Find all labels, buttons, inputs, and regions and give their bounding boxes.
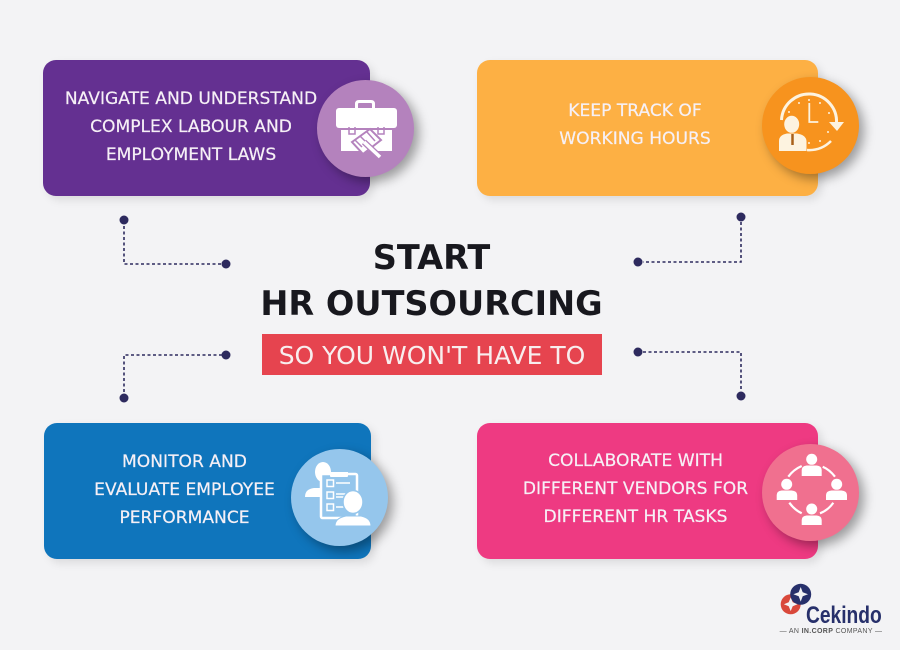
- connector: bottom right: [634, 348, 746, 400]
- text: navigate and understand: COMPLEX LABOUR AND: [90, 117, 292, 137]
- text: monitor and evaluate: PERFORMANCE: [119, 508, 250, 528]
- text: monitor and evaluate: EVALUATE EMPLOYEE: [94, 480, 275, 500]
- icon: clock with employee: [762, 77, 859, 174]
- connector: top right: [634, 212, 746, 266]
- text: monitor and evaluate: MONITOR AND: [122, 452, 247, 472]
- text: navigate and understand: EMPLOYMENT LAWS: [106, 145, 276, 165]
- icon: briefcase with handshake: [317, 80, 414, 177]
- logo: Cekindo: [780, 584, 882, 635]
- text: collaborate with vendors: DIFFERENT HR TASKS: [544, 507, 727, 527]
- panel: employee performance: [44, 423, 371, 559]
- text: collaborate with vendors: [523, 451, 748, 527]
- icon: circle of people: [762, 444, 859, 541]
- connector: top left: [120, 216, 230, 268]
- title: START: [373, 238, 490, 277]
- title: [260, 238, 603, 323]
- text: monitor and evaluate: [94, 452, 275, 528]
- panel: navigate labour laws: [43, 60, 370, 196]
- subtitle banner: [262, 334, 602, 375]
- subtitle banner: SO YOU WON'T HAVE TO: [279, 341, 585, 370]
- text: collaborate with vendors: DIFFERENT VENDORS FOR: [523, 479, 748, 499]
- text: keep track of working hours: WORKING HOURS: [559, 129, 711, 149]
- panel: working hours: [477, 60, 818, 196]
- logo tagline: — AN IN.CORP COMPANY —: [780, 628, 882, 635]
- text: navigate and understand: [65, 89, 317, 165]
- text: collaborate with vendors: COLLABORATE WITH: [548, 451, 723, 471]
- connector: bottom left: [120, 350, 230, 402]
- icon: clipboard with people: [291, 449, 388, 546]
- text: keep track of working hours: KEEP TRACK OF: [568, 101, 702, 121]
- text: navigate and understand: NAVIGATE AND UNDERSTAND: [65, 89, 317, 109]
- logo wordmark: Cekindo: [806, 602, 882, 629]
- title: HR OUTSOURCING: [260, 284, 603, 323]
- panel: vendors: [477, 423, 818, 559]
- text: keep track of working hours: [559, 101, 711, 149]
